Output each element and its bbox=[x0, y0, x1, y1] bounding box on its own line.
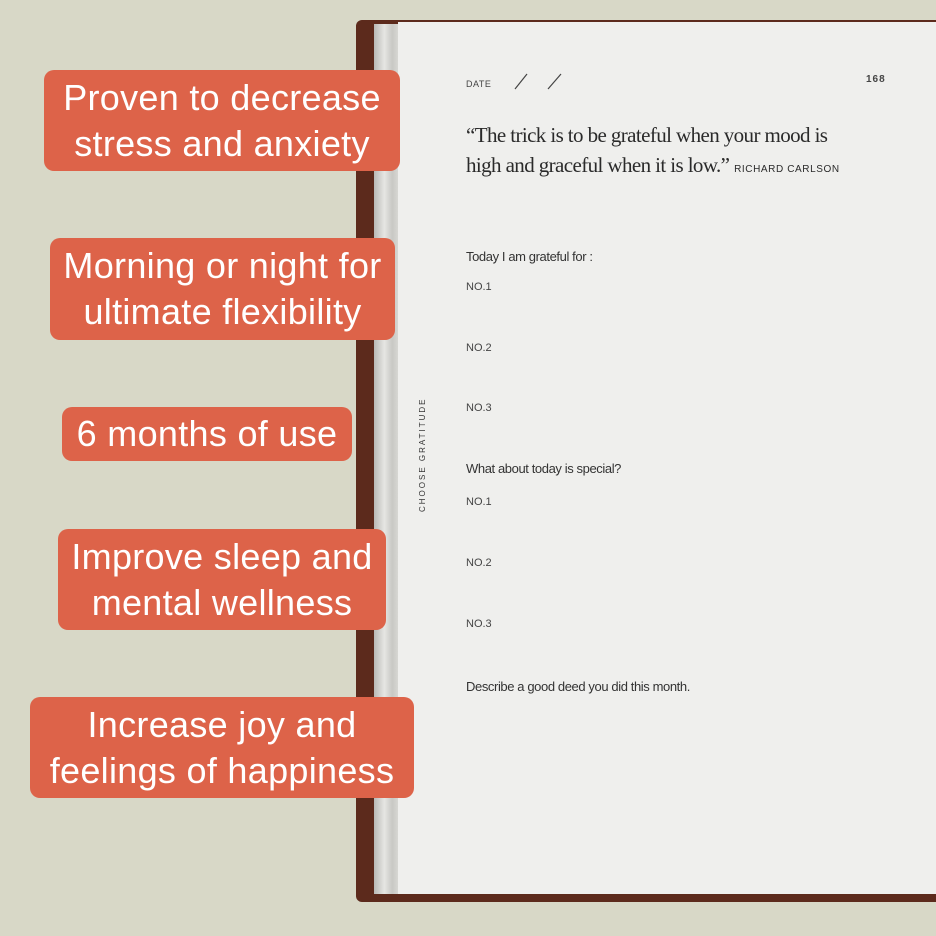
quote: “The trick is to be grateful when your mood is bbox=[466, 123, 827, 147]
text: NO.2 bbox=[466, 557, 492, 569]
prompt: grateful: Today I am grateful for : bbox=[466, 249, 593, 264]
prompt: good deed: Describe a good deed you did this month. bbox=[466, 679, 690, 694]
callout: stress bbox=[44, 70, 400, 171]
callout: 6 months bbox=[62, 407, 352, 461]
callout: 6 months: 6 months of use bbox=[77, 413, 337, 454]
quote bbox=[466, 123, 840, 177]
callout: stress: stress and anxiety bbox=[74, 122, 370, 164]
callout: flexibility: ultimate flexibility bbox=[83, 291, 362, 332]
page bbox=[398, 22, 936, 894]
prompt: special: What about today is special? bbox=[466, 461, 621, 476]
text: NO.3 bbox=[466, 618, 492, 630]
text: NO.2 bbox=[466, 342, 492, 354]
text: NO.1 bbox=[466, 496, 492, 508]
callout: sleep bbox=[58, 529, 386, 630]
text: NO.3 bbox=[466, 402, 492, 414]
callout: flexibility bbox=[50, 238, 395, 340]
callout: joy: Increase joy and bbox=[88, 704, 356, 744]
book cover bbox=[356, 20, 936, 902]
callout: joy bbox=[30, 697, 414, 798]
callout: joy: feelings of happiness bbox=[50, 750, 394, 790]
book: journal bbox=[356, 20, 936, 902]
date slashes bbox=[514, 74, 562, 90]
date line: DATE bbox=[466, 79, 491, 89]
callout: sleep: mental wellness bbox=[92, 582, 352, 622]
page edges bbox=[374, 24, 400, 894]
quote: high and graceful when it is low.” RICHARD CARLSON bbox=[466, 153, 840, 177]
vertical label: CHOOSE GRATITUDE bbox=[418, 397, 427, 512]
callout: stress: Proven to decrease bbox=[63, 76, 381, 118]
callout: sleep: Improve sleep and bbox=[71, 536, 373, 576]
callout: flexibility: Morning or night for bbox=[63, 245, 382, 286]
page number: 168 bbox=[866, 74, 886, 85]
text: NO.1 bbox=[466, 281, 492, 293]
numbered lines bbox=[466, 281, 492, 630]
